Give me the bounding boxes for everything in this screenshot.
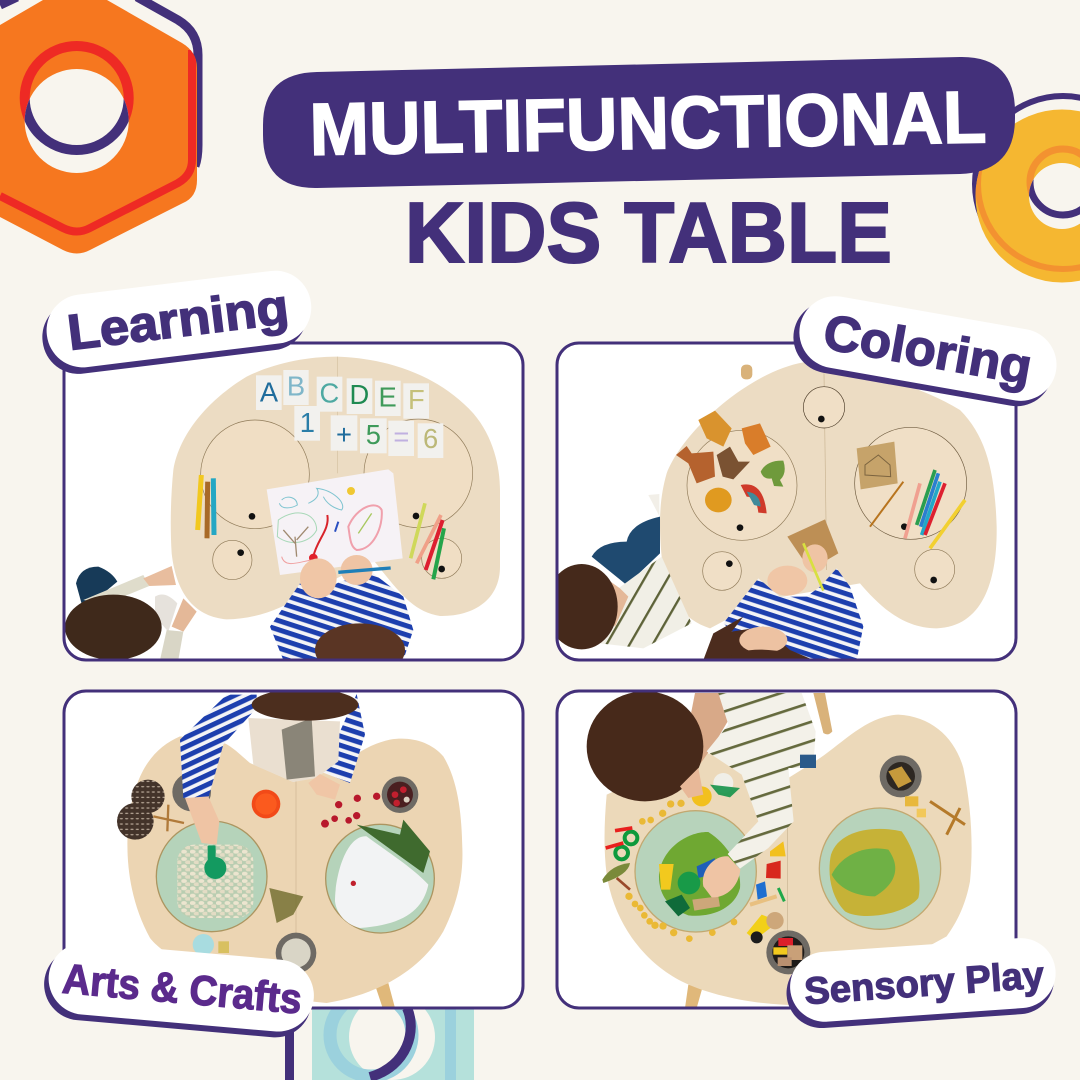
pine cones [117, 780, 184, 840]
learning table top [171, 357, 500, 619]
label: Sensory Play: Sensory Play [803, 955, 1045, 1013]
child in green striped top [587, 691, 816, 897]
child in grey striped top [546, 494, 692, 649]
letter and number cards: 5 [366, 419, 381, 450]
letter and number cards: D [349, 379, 369, 410]
drawing paper [267, 469, 403, 575]
bowls and toys [602, 755, 965, 974]
title: KIDS TABLE: KIDS TABLE [405, 186, 892, 281]
chair leg [741, 365, 752, 379]
letter and number cards: F [408, 384, 425, 415]
child in blue striped top [703, 543, 863, 660]
letter and number cards: B [287, 370, 305, 401]
letter and number cards: E [379, 382, 397, 413]
trays and small bowls [156, 773, 434, 973]
panel: learning photo [64, 343, 523, 677]
child in grey striped top [65, 566, 197, 660]
label: Coloring: Coloring [820, 304, 1036, 395]
label: Sensory Play [784, 936, 1058, 1030]
label: Learning [37, 267, 316, 378]
decorative hexagon nut top left [0, 0, 198, 254]
decorative donut top right [975, 96, 1080, 282]
cranberries [321, 793, 380, 828]
letter and number cards: + [336, 419, 352, 450]
title banner: MULTIFUNCTIONAL [263, 57, 1015, 188]
letter and number cards [256, 370, 443, 458]
letter and number cards: A [260, 376, 279, 407]
table legs [685, 693, 832, 1008]
left tray with green sand [635, 811, 756, 932]
label: Coloring [788, 290, 1062, 412]
label: Learning: Learning [64, 278, 292, 361]
panel: coloring photo [546, 343, 1016, 660]
sensory table top [605, 715, 972, 1005]
child in blue striped top [270, 555, 414, 658]
label: Arts & Crafts [41, 939, 317, 1041]
label: Arts & Crafts: Arts & Crafts [61, 955, 304, 1023]
child with apron and scoop [180, 689, 365, 879]
letter and number cards: = [393, 421, 409, 452]
table leg [376, 983, 395, 1008]
letter and number cards: 6 [423, 423, 438, 454]
markers and brush [870, 470, 965, 548]
title banner: MULTIFUNCTIONAL: MULTIFUNCTIONAL [309, 75, 987, 171]
letter and number cards: C [319, 378, 339, 409]
pasta pieces [625, 800, 737, 942]
coloring table top [660, 362, 997, 628]
wooden coloured toys [676, 411, 785, 513]
decorative teal shape bottom [285, 1010, 474, 1080]
panel: sensory play photo [557, 691, 1016, 1008]
right tray with yellow and green sand [819, 808, 941, 929]
panel: arts and crafts photo [64, 689, 523, 1008]
kraft cards [787, 442, 898, 570]
letter and number cards: 1 [300, 407, 315, 438]
felt-tip markers [198, 475, 444, 579]
arts table top [127, 736, 462, 1003]
